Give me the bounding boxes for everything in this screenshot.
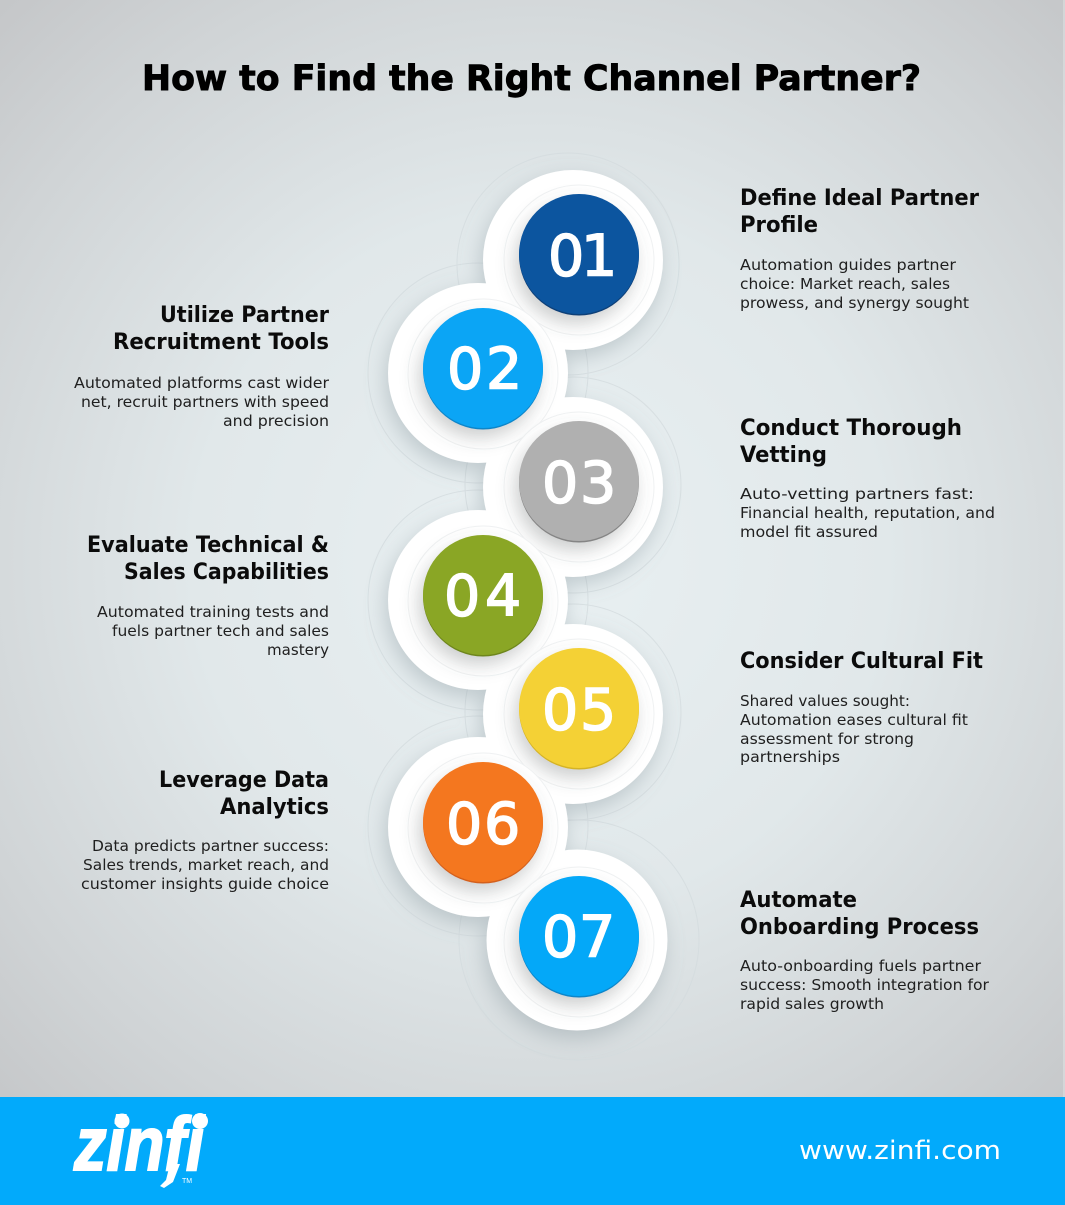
step 6 text: Data predicts partner success: — [92, 837, 329, 855]
step 3 text — [740, 415, 995, 541]
step 6 text: Sales trends, market reach, and — [83, 856, 329, 874]
step 2 text: Automated platforms cast wider — [74, 374, 330, 392]
circle 04 — [408, 526, 558, 676]
step 7 text — [740, 887, 990, 1013]
step 1 text: choice: Market reach, sales — [740, 275, 950, 293]
step 6 text: Analytics — [220, 794, 329, 820]
step 5 text — [740, 648, 983, 766]
step 2 text: and precision — [223, 412, 329, 430]
step 7 text: Automate — [740, 887, 857, 913]
step 5 text: assessment for strong — [740, 730, 914, 748]
step 5 text: Consider Cultural Fit — [740, 648, 983, 674]
step 7 text: success: Smooth integration for — [740, 976, 990, 994]
step 3 text: model fit assured — [740, 523, 878, 541]
step 3 text: Financial health, reputation, and — [740, 504, 995, 522]
step 4 text — [87, 532, 329, 659]
thin outer rings — [368, 153, 699, 1060]
title: How to Find the Right Channel Partner? — [142, 59, 921, 99]
step 4 text: Sales Capabilities — [124, 559, 329, 585]
circle 01: 01 — [548, 224, 617, 290]
step 3 text: Auto-vetting partners fast: — [740, 485, 974, 503]
circle 07 — [504, 867, 654, 1017]
step 3 text: Vetting — [740, 442, 827, 468]
step 2 text: Utilize Partner — [160, 302, 330, 328]
step 6 text: Leverage Data — [159, 767, 329, 793]
website url: www.zinfi.com — [799, 1136, 1001, 1166]
step 2 text: Recruitment Tools — [113, 329, 329, 355]
step 5 text: Shared values sought: — [740, 692, 910, 710]
step 1 text — [740, 185, 980, 312]
step 5 text: Automation eases cultural fit — [740, 711, 968, 729]
circle 02: 02 — [447, 336, 522, 402]
step 6 text: customer insights guide choice — [81, 875, 329, 893]
step 4 text: Evaluate Technical & — [87, 532, 329, 558]
step 7 text: Auto-onboarding fuels partner — [740, 957, 982, 975]
circle 03: 03 — [542, 450, 616, 516]
circle 04: 04 — [444, 564, 521, 630]
step 6 text — [81, 767, 329, 893]
circle 07: 07 — [542, 904, 615, 970]
step 2 text — [74, 302, 330, 430]
footer banner — [0, 1097, 1065, 1205]
step 4 text: mastery — [267, 641, 329, 659]
step 1 text: prowess, and synergy sought — [740, 294, 969, 312]
circle 06 — [408, 753, 558, 903]
circle 05: 05 — [542, 678, 616, 744]
logo: zinfi: zinfi — [73, 1102, 206, 1187]
step 1 text: Define Ideal Partner — [740, 185, 980, 211]
step 7 text: Onboarding Process — [740, 914, 979, 940]
step 5 text: partnerships — [740, 748, 840, 766]
circle 02 — [408, 299, 558, 449]
step 1 text: Automation guides partner — [740, 256, 957, 274]
stepped circle chain — [408, 185, 654, 1017]
white disc shadows — [388, 170, 668, 1030]
circle 01 — [504, 185, 654, 335]
step 2 text: net, recruit partners with speed — [81, 393, 329, 411]
step 7 text: rapid sales growth — [740, 995, 884, 1013]
circle 06: 06 — [446, 792, 520, 858]
step 4 text: Automated training tests and — [97, 603, 329, 621]
step 4 text: fuels partner tech and sales — [112, 622, 329, 640]
step 3 text: Conduct Thorough — [740, 415, 962, 441]
step 1 text: Profile — [740, 212, 818, 238]
circle 03 — [504, 412, 654, 562]
logo: zinfi: TM — [182, 1178, 192, 1185]
circle 05 — [504, 639, 654, 789]
